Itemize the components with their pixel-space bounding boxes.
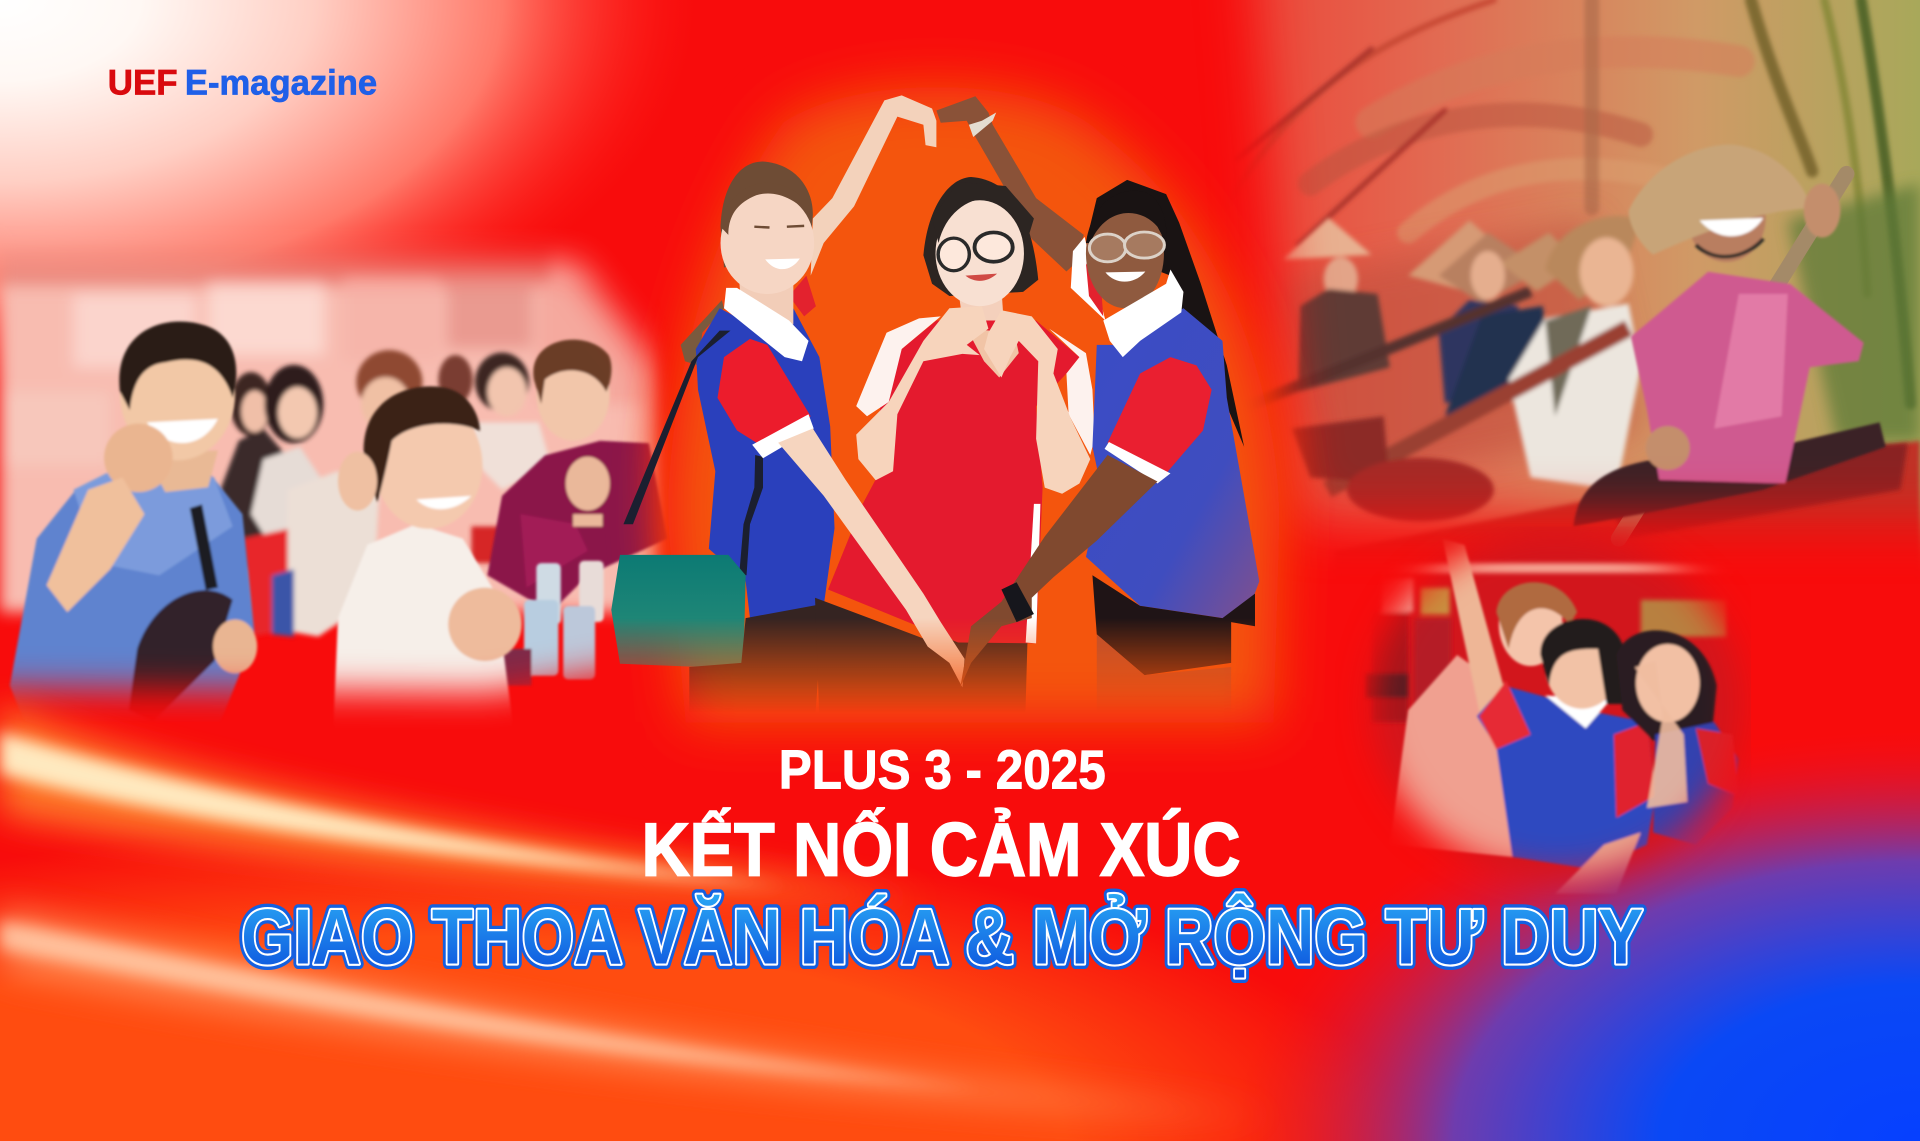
right girl collar (1103, 270, 1183, 357)
center girl polo (828, 320, 1079, 643)
background students (214, 350, 551, 637)
boat (1388, 438, 1920, 558)
center girl white side stripe (1026, 504, 1040, 643)
photo: students making finger hearts (left) (0, 208, 667, 735)
streak glow one (0, 704, 931, 901)
three girls (1390, 539, 1739, 894)
streak core two (0, 921, 980, 1090)
right girl hair and braids (1086, 180, 1244, 447)
left girl collar (724, 288, 809, 361)
streak core one (0, 732, 784, 886)
left girl bag strap (623, 331, 730, 524)
right girl white sleeve behind (1071, 237, 1105, 320)
girl in white shirt (333, 386, 522, 735)
left girl pants (689, 604, 824, 719)
logo: UEF E-magazine: UEF (108, 62, 178, 102)
shoulder bag (611, 555, 746, 668)
oar (1619, 174, 1847, 539)
center girl hair (923, 177, 1038, 296)
right girl arm reaching down (960, 455, 1157, 687)
left girl ponytail (681, 300, 724, 365)
light streaks bottom left (0, 704, 1273, 1117)
center girl left arm (856, 306, 988, 480)
right girl shorts (1092, 575, 1255, 675)
bookshelf (1347, 563, 1739, 722)
logo: UEF E-magazine: E-magazine (185, 62, 377, 102)
wrist watch (1001, 582, 1034, 622)
left girl polo (696, 308, 835, 618)
title line: GIAO THOA VĂN HÓA & MỞ RỘNG TƯ DUY: GIAO THOA VĂN HÓA & MỞ RỘNG TƯ DUY (241, 892, 1643, 980)
right girl leg (1097, 634, 1231, 719)
left girl neck and face (721, 161, 814, 325)
palm fronds (1224, 0, 1910, 404)
right girl face (1086, 191, 1167, 308)
left girl second strap (739, 455, 763, 575)
right girl raised arm (936, 96, 1084, 272)
man in maroon shirt (487, 340, 667, 612)
center girl neck (958, 288, 1004, 320)
center girl left white sleeve (856, 316, 941, 416)
photo: selfie group in blue-red shirts (lower right) (1335, 526, 1751, 906)
orange glow behind center group (667, 87, 1280, 722)
right girl red trim (1086, 263, 1103, 316)
classroom backdrop (0, 208, 661, 612)
title line: GIAO THOA VĂN HÓA & MỞ RỘNG TƯ DUY: GIAO THOA VĂN HÓA & MỞ RỘNG TƯ DUY (241, 892, 1643, 980)
title line: PLUS 3 - 2025: PLUS 3 - 2025 (779, 738, 1106, 800)
center girl right white sleeve (1049, 329, 1095, 455)
title block (241, 738, 1643, 980)
right girl cuff (1105, 442, 1170, 484)
bracelet (969, 113, 996, 137)
left girl red shoulder behind (793, 276, 816, 316)
photo: boat rowing with conical hats (right) (1228, 0, 1920, 554)
streak glow two (0, 908, 1273, 1117)
center students forming a heart (611, 95, 1259, 719)
boy in blue shirt (10, 321, 257, 722)
water bottles (502, 561, 604, 686)
rower woman with conical hat (1573, 145, 1886, 526)
center girl right arm (984, 310, 1090, 494)
boat rowers in background (1247, 216, 1641, 522)
left girl raised arm (811, 95, 936, 276)
right girl polo (1086, 308, 1259, 618)
right girl sleeve (1108, 357, 1212, 484)
center girl chest in hand heart (967, 329, 1019, 378)
left girl sleeve (717, 339, 811, 447)
center girl pants (815, 598, 1027, 719)
title line: KẾT NỐI CẢM XÚC: KẾT NỐI CẢM XÚC (642, 807, 1240, 891)
center girl face (932, 182, 1034, 306)
left girl cuff (752, 414, 814, 458)
left girl arm reaching down (778, 429, 965, 687)
